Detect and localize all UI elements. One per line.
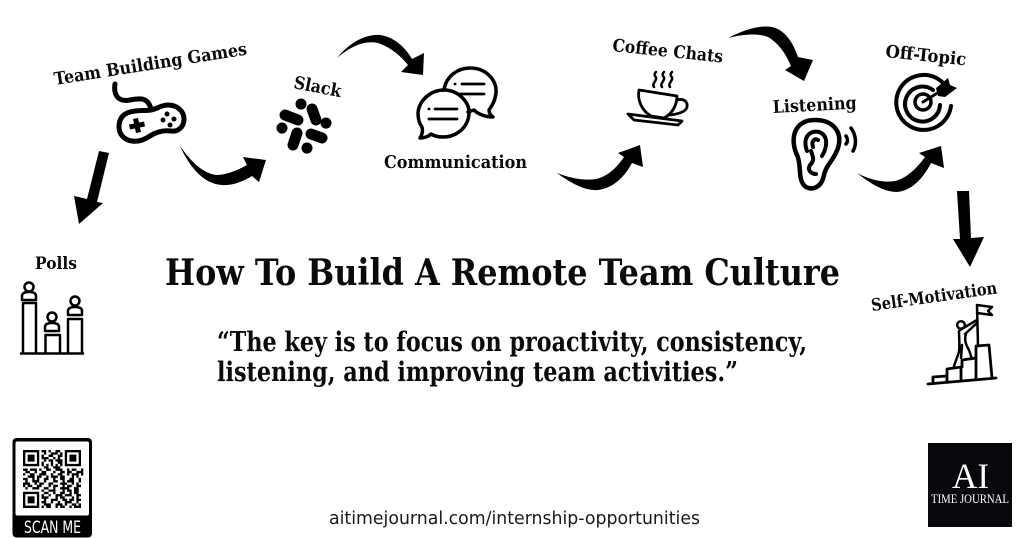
icon: ear with sound waves	[794, 120, 855, 188]
icon: chat bubbles	[418, 68, 496, 138]
quote: “The key is to focus on proactivity, consistency,	[217, 327, 807, 358]
icon: climber with flag on steps	[928, 305, 996, 384]
logo: AI Time Journal: AI	[952, 456, 989, 496]
label: Listening: Listening	[772, 94, 857, 118]
QR pattern	[23, 450, 83, 508]
icon: slack logo	[282, 104, 326, 148]
footer url: aitimejournal.com/internship-opportunities	[329, 509, 700, 529]
logo: AI Time Journal	[928, 443, 1012, 527]
label: Self-Motivation: Self-Motivation	[870, 278, 998, 316]
label: Team Building Games: Team Building Games	[53, 40, 249, 90]
icon: game controller	[115, 84, 184, 141]
QR code badge	[12, 438, 92, 538]
icon: polls people on bars	[21, 282, 83, 354]
arrow: controller to polls	[74, 151, 109, 224]
label: Coffee Chats: Coffee Chats	[611, 36, 724, 68]
label: Communication: Communication	[384, 152, 527, 173]
label: Slack: Slack	[292, 73, 344, 102]
icon: target with arrow	[896, 75, 957, 130]
icon: coffee cup	[628, 72, 687, 125]
arrow: listening to off-topic	[857, 146, 944, 192]
label: Polls: Polls	[35, 254, 77, 274]
label: Off-Topic: Off-Topic	[884, 42, 967, 70]
quote	[217, 327, 807, 388]
arrow: coffee to listening	[728, 26, 813, 81]
QR code badge: SCAN ME	[24, 518, 81, 538]
logo: AI Time Journal: TIME JOURNAL	[931, 491, 1009, 506]
arrow: controller to slack	[180, 146, 266, 185]
quote: listening, and improving team activities.”	[217, 357, 738, 388]
arrow: communication to coffee	[557, 145, 643, 190]
arrow: off-topic to self-motivation	[953, 191, 984, 267]
arrow: slack to communication	[337, 35, 424, 75]
title: How To Build A Remote Team Culture	[165, 252, 840, 294]
